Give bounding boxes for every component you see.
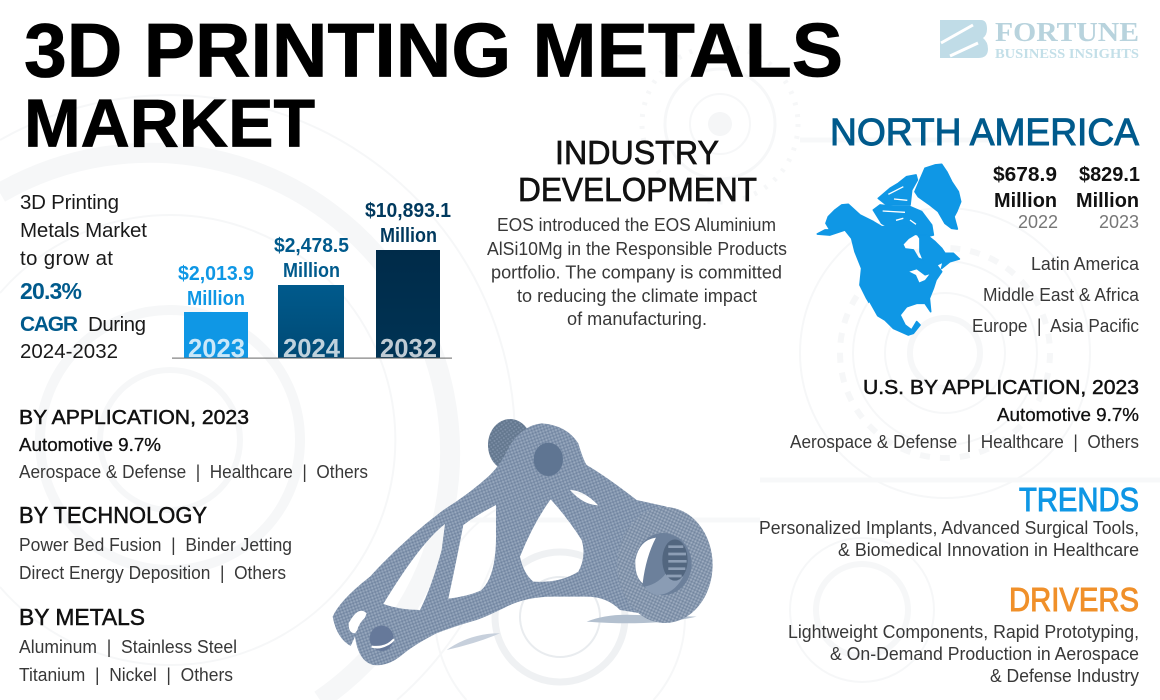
U.S. by application: Aerospace & Defense | Healthcare | Others bbox=[790, 432, 1139, 452]
by application: BY APPLICATION, 2023 bbox=[19, 406, 249, 429]
drivers: Lightweight Components, Rapid Prototyping, bbox=[788, 622, 1139, 642]
bar chart: market size bbox=[172, 200, 452, 363]
by technology: BY TECHNOLOGY bbox=[19, 502, 207, 528]
by metals: Titanium | Nickel | Others bbox=[19, 665, 233, 685]
other regions list: Europe | Asia Pacific bbox=[972, 316, 1139, 336]
stat: 2022 value bbox=[993, 163, 1058, 232]
industry development heading bbox=[518, 134, 757, 208]
bar 2024: 2024 bbox=[283, 333, 341, 363]
trends: TRENDS bbox=[1019, 481, 1139, 518]
bar 2024: Million bbox=[283, 260, 340, 282]
logo: Fortune Business Insights: FORTUNE bbox=[995, 17, 1139, 47]
logo: Fortune Business Insights: BUSINESS INSIGHTS bbox=[995, 47, 1139, 62]
industry development text: portfolio. The company is committed bbox=[491, 262, 782, 282]
stat: 2023 value: $829.1 bbox=[1079, 163, 1140, 186]
CAGR text block: to grow at bbox=[20, 247, 113, 270]
by technology: Direct Energy Deposition | Others bbox=[19, 563, 286, 583]
CAGR text block: 20.3% bbox=[20, 278, 82, 304]
title bbox=[24, 8, 843, 162]
by technology bbox=[19, 502, 292, 583]
other regions list: Middle East & Africa bbox=[983, 285, 1140, 305]
by metals: BY METALS bbox=[19, 604, 145, 630]
CAGR text block: Metals Market bbox=[20, 219, 147, 242]
bar 2023: Million bbox=[187, 288, 245, 310]
bar 2032: $10,893.1 bbox=[365, 200, 451, 222]
bar 2023 bbox=[178, 263, 254, 363]
bar 2032 bbox=[365, 200, 451, 363]
industry development text: EOS introduced the EOS Aluminium bbox=[497, 215, 776, 235]
bar 2024: $2,478.5 bbox=[274, 235, 349, 257]
stat: 2023 value bbox=[1076, 163, 1140, 232]
stat: 2022 value: Million bbox=[994, 189, 1057, 212]
industry development text: of manufacturing. bbox=[567, 309, 707, 329]
logo: Fortune Business Insights bbox=[940, 17, 1139, 62]
by application: Aerospace & Defense | Healthcare | Others bbox=[19, 462, 368, 482]
CAGR text block bbox=[20, 191, 147, 363]
stat: 2023 value: Million bbox=[1076, 189, 1139, 212]
bar 2032: 2032 bbox=[380, 333, 437, 363]
U.S. by application bbox=[790, 376, 1139, 452]
bar 2023: 2023 bbox=[188, 333, 245, 363]
industry development text bbox=[487, 215, 787, 329]
U.S. by application: U.S. BY APPLICATION, 2023 bbox=[863, 376, 1139, 399]
bar 2023: $2,013.9 bbox=[178, 263, 254, 285]
industry development text: to reducing the climate impact bbox=[517, 286, 757, 306]
CAGR text block: During bbox=[88, 313, 146, 336]
by application bbox=[19, 406, 368, 482]
CAGR text block: 3D Printing bbox=[20, 191, 119, 214]
drivers: DRIVERS bbox=[1009, 581, 1139, 618]
map: North America bbox=[817, 164, 961, 335]
drivers: & Defense Industry bbox=[990, 666, 1139, 686]
by metals: Aluminum | Stainless Steel bbox=[19, 637, 237, 657]
CAGR text block: 2024-2032 bbox=[20, 340, 118, 363]
stat: 2022 value: 2022 bbox=[1018, 212, 1058, 232]
trends bbox=[759, 481, 1139, 560]
bar 2024 bbox=[274, 235, 349, 363]
CAGR text block: CAGR bbox=[20, 313, 78, 336]
stat: 2022 value: $678.9 bbox=[993, 163, 1057, 186]
other regions list: Latin America bbox=[1031, 254, 1140, 274]
industry development heading: DEVELOPMENT bbox=[518, 171, 757, 208]
other regions list bbox=[972, 254, 1140, 336]
by metals bbox=[19, 604, 237, 685]
title: MARKET bbox=[24, 86, 315, 162]
bar 2032: Million bbox=[380, 225, 437, 247]
illustration: 3D printed metal bracket bbox=[333, 419, 713, 665]
drivers: & On-Demand Production in Aerospace bbox=[830, 644, 1139, 664]
title: 3D PRINTING METALS bbox=[24, 8, 843, 94]
heading: North America: NORTH AMERICA bbox=[830, 112, 1140, 154]
by application: Automotive 9.7% bbox=[19, 435, 161, 455]
industry development text: AlSi10Mg in the Responsible Products bbox=[487, 239, 787, 259]
trends: & Biomedical Innovation in Healthcare bbox=[838, 540, 1139, 560]
trends: Personalized Implants, Advanced Surgical Tools, bbox=[759, 518, 1139, 538]
industry development heading: INDUSTRY bbox=[555, 134, 719, 171]
by technology: Power Bed Fusion | Binder Jetting bbox=[19, 535, 292, 555]
drivers bbox=[788, 581, 1139, 686]
stat: 2023 value: 2023 bbox=[1099, 212, 1139, 232]
U.S. by application: Automotive 9.7% bbox=[997, 405, 1139, 425]
